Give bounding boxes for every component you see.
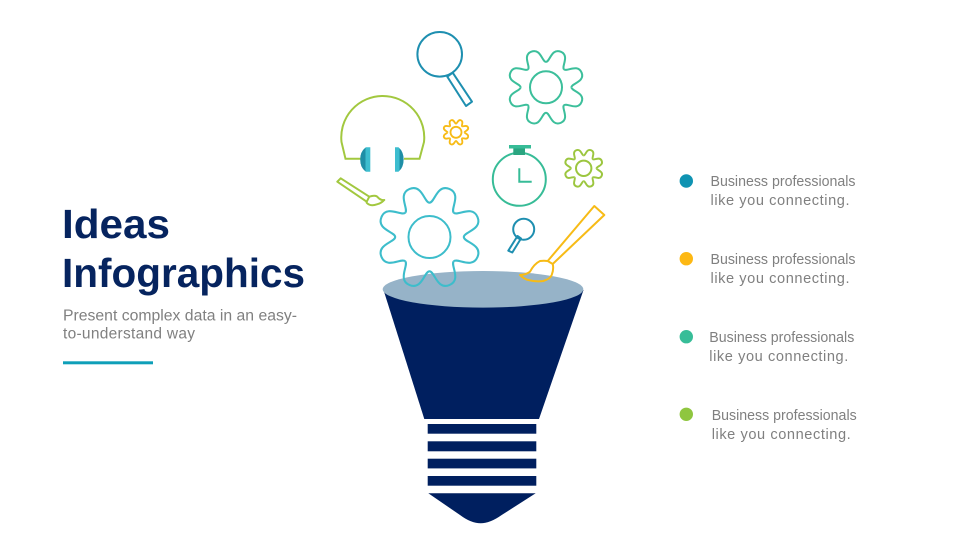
subtitle text <box>63 308 297 342</box>
title <box>62 201 305 296</box>
legend item 1: like you connecting. <box>710 193 850 209</box>
icon: small magnifier <box>508 219 534 252</box>
funnel body <box>384 290 584 419</box>
legend item 3 <box>680 330 854 365</box>
legend item 4: like you connecting. <box>712 427 851 443</box>
icon: lime gear <box>564 148 604 188</box>
icon: large blue gear <box>377 184 482 290</box>
legend item 2: Business professionals <box>710 252 856 268</box>
legend item 4 <box>680 408 857 443</box>
legend item 1: Business professionals <box>710 174 856 190</box>
legend item 3: Business professionals <box>709 330 854 346</box>
bulb funnel <box>383 271 584 523</box>
legend item 4: Business professionals <box>712 408 857 424</box>
stopwatch crown <box>509 145 531 148</box>
icon: stopwatch <box>493 145 546 206</box>
bulb base stripes <box>428 424 536 486</box>
bulb tip <box>428 493 536 523</box>
legend item 2 <box>680 252 856 287</box>
title: Ideas <box>62 201 170 247</box>
icon: small yellow gear <box>443 119 469 146</box>
title: Infographics <box>62 250 305 296</box>
left ear cup <box>360 147 370 172</box>
icon: green paint brush <box>337 178 384 205</box>
stopwatch hands <box>519 168 532 182</box>
funnel opening <box>383 271 583 308</box>
icon: large green gear <box>507 48 585 126</box>
subtitle text: to-understand way <box>63 326 195 342</box>
headband <box>341 96 424 159</box>
icon: headphones <box>341 96 424 172</box>
right ear cup <box>395 147 404 172</box>
legend item 3: like you connecting. <box>709 349 848 365</box>
legend item 2: like you connecting. <box>710 271 850 287</box>
accent underline <box>63 361 153 364</box>
legend item 1 <box>680 174 856 209</box>
icon: yellow paint brush <box>520 206 604 281</box>
subtitle text: Present complex data in an easy- <box>63 308 297 324</box>
icon: large magnifier <box>417 32 472 106</box>
